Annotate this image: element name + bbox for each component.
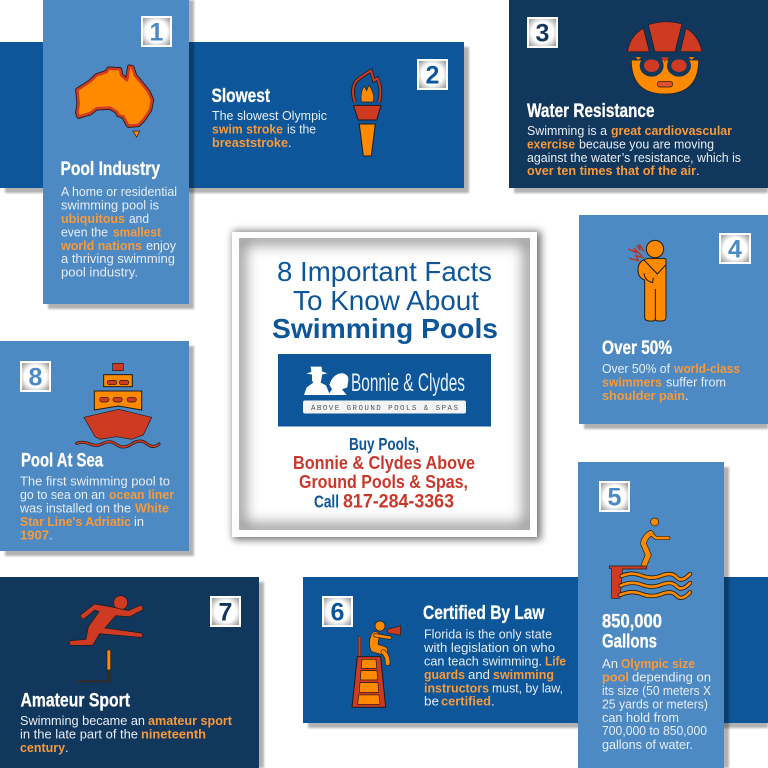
text: certified by law body: with legislation on who bbox=[423, 640, 555, 655]
badge: number 6: 6 bbox=[331, 598, 344, 626]
text: 850,000 gallons body: its size (50 meters X bbox=[602, 683, 711, 698]
icon: diver on board above waves bbox=[609, 518, 690, 598]
text: 850,000 gallons body: can hold from bbox=[602, 710, 679, 725]
text: slowest body: is the bbox=[287, 122, 316, 136]
text: certified by law body: certified bbox=[441, 694, 491, 708]
text: 850,000 gallons body: depending on bbox=[632, 670, 711, 684]
heading: 850,000 gallons: 850,000 bbox=[602, 611, 662, 633]
panel 6: certified by law bbox=[303, 577, 768, 728]
text: 850,000 gallons body: 700,000 to 850,000 bbox=[602, 723, 707, 738]
text: slowest body: . bbox=[288, 135, 292, 150]
logo bar: ABOVE GROUND POOLS & SPAS bbox=[311, 405, 458, 413]
text: certified by law body: . bbox=[491, 694, 495, 708]
text: amateur sport body: in the late part of the bbox=[20, 726, 138, 742]
text: pool industry body: ubiquitous bbox=[61, 211, 125, 226]
text: certified by law body: and bbox=[468, 667, 490, 682]
text: water resistance body: exercise bbox=[527, 136, 575, 152]
text: pool industry body: even the bbox=[61, 224, 108, 240]
logo: bonnie and clydes bbox=[278, 354, 491, 426]
heading: 850,000 gallons: Gallons bbox=[602, 631, 657, 653]
icon: torch bbox=[353, 71, 381, 156]
text: pool at sea body: Star Line's Adriatic bbox=[20, 514, 131, 529]
text: pool industry body: pool industry. bbox=[61, 264, 138, 280]
icon: australia map bbox=[77, 67, 152, 137]
heading: main title: Swimming Pools bbox=[272, 313, 498, 344]
badge: number 2: 2 bbox=[426, 62, 439, 90]
badge: number 3 bbox=[527, 17, 558, 48]
text: amateur sport body: century bbox=[20, 740, 66, 755]
text: pool industry body: swimming pool is bbox=[61, 198, 159, 212]
text: water resistance body: great cardiovascular bbox=[611, 123, 732, 138]
badge: number 1: 1 bbox=[150, 18, 164, 46]
text: 850,000 gallons body: An bbox=[602, 656, 618, 671]
badge: number 8 bbox=[20, 361, 51, 392]
text: pool at sea body: ocean liner bbox=[109, 487, 174, 502]
text: certified by law body: Florida is the only state bbox=[424, 627, 552, 642]
text: pool at sea body: was installed on the bbox=[19, 500, 131, 516]
heading: slowest: Slowest bbox=[212, 85, 270, 107]
text: over 50% body: suffer from bbox=[666, 374, 726, 390]
badge: number 7 bbox=[210, 596, 241, 627]
text: call to action: Bonnie & Clydes Above bbox=[293, 452, 475, 473]
badge: number 4 bbox=[719, 233, 751, 264]
badge: number 1 bbox=[141, 16, 172, 47]
text: amateur sport body: Swimming became an bbox=[20, 713, 145, 728]
text: certified by law body: Life bbox=[545, 654, 566, 668]
text: 850,000 gallons body: Olympic size bbox=[621, 656, 695, 671]
text: slowest body: breaststroke bbox=[212, 135, 288, 150]
panel 2: slowest bbox=[0, 42, 469, 193]
text: logo name: Bonnie & Clydes bbox=[351, 369, 465, 397]
text: pool industry body: and bbox=[129, 211, 149, 226]
text: water resistance body bbox=[527, 123, 741, 178]
text: amateur sport body: . bbox=[65, 740, 69, 755]
text: certified by law body: be bbox=[424, 694, 439, 708]
text: amateur sport body bbox=[20, 713, 233, 755]
heading: amateur sport: Amateur Sport bbox=[20, 690, 130, 712]
text: over 50% body bbox=[602, 361, 740, 403]
heading: over 50%: Over 50% bbox=[602, 337, 672, 359]
badge: number 3: 3 bbox=[536, 20, 549, 48]
text: certified by law body: swimming bbox=[493, 667, 554, 682]
badge: number 4: 4 bbox=[728, 236, 742, 264]
text: pool industry body: enjoy bbox=[146, 238, 177, 253]
icon: lifeguard on chair with megaphone bbox=[352, 621, 401, 707]
heading: 850,000 gallons bbox=[602, 611, 662, 653]
icon: hurdler bbox=[71, 596, 141, 682]
text: amateur sport body: nineteenth bbox=[141, 726, 206, 742]
panel 3: water resistance bbox=[509, 0, 768, 193]
heading: main title: To Know About bbox=[293, 285, 479, 316]
panel 1: pool industry bbox=[43, 0, 194, 309]
text: 850,000 gallons body: pool bbox=[602, 670, 629, 684]
text: pool industry body: smallest bbox=[113, 224, 162, 240]
panel 7: amateur sport bbox=[0, 577, 264, 768]
icon: person with shoulder pain bbox=[628, 240, 666, 321]
text: certified by law body: guards bbox=[424, 667, 465, 682]
text: pool at sea body: White bbox=[135, 500, 169, 516]
text: call to action: Call bbox=[314, 492, 339, 512]
heading: main title: 8 Important Facts bbox=[277, 256, 492, 287]
text: pool industry body bbox=[60, 184, 177, 280]
logo bar bbox=[303, 400, 466, 414]
text: water resistance body: because you are moving bbox=[579, 136, 714, 152]
badge: number 2 bbox=[417, 59, 448, 90]
text: certified by law body: can teach swimming. bbox=[424, 654, 542, 668]
text: water resistance body: against the water’s resistance, which is bbox=[527, 150, 741, 165]
panel 4: over 50% bbox=[579, 215, 768, 429]
text: over 50% body: swimmers bbox=[602, 374, 662, 390]
badge: number 5 bbox=[599, 481, 630, 512]
icon: swimmer head with cap and goggles bbox=[627, 22, 702, 94]
text: pool at sea body: . bbox=[49, 528, 53, 542]
text: certified by law body: instructors bbox=[424, 680, 489, 696]
text: pool industry body: a thriving swimming bbox=[61, 251, 175, 266]
icon: ocean liner bbox=[77, 363, 159, 447]
text: water resistance body: over ten times that of the air bbox=[527, 163, 696, 178]
heading: pool at sea: Pool At Sea bbox=[21, 450, 103, 472]
text: over 50% body: Over 50% of bbox=[602, 361, 670, 376]
badge: number 6 bbox=[322, 596, 353, 627]
text: pool industry body: A home or residential bbox=[61, 184, 177, 199]
text: 850,000 gallons body: gallons of water. bbox=[602, 737, 693, 752]
text: pool at sea body: in bbox=[134, 514, 144, 529]
text: amateur sport body: amateur sport bbox=[148, 713, 233, 728]
text: slowest body: The slowest Olympic bbox=[212, 108, 328, 123]
text: pool at sea body: go to sea on an bbox=[20, 487, 105, 502]
text: 850,000 gallons body bbox=[602, 656, 711, 752]
badge: number 8: 8 bbox=[29, 364, 43, 392]
badge: number 5: 5 bbox=[608, 484, 622, 512]
text: over 50% body: shoulder pain bbox=[602, 388, 685, 403]
text: call to action: Buy Pools, bbox=[349, 434, 419, 454]
text: certified by law body: must, by law, bbox=[492, 680, 563, 696]
text: slowest body bbox=[212, 108, 328, 150]
text: call to action: 817-284-3363 bbox=[343, 492, 454, 513]
text: pool at sea body: 1907 bbox=[20, 528, 49, 542]
text: water resistance body: . bbox=[696, 163, 700, 178]
text: water resistance body: Swimming is a bbox=[527, 123, 608, 138]
panel: center title card bbox=[232, 231, 541, 540]
text: call to action: Ground Pools & Spas, bbox=[299, 471, 468, 492]
heading: main title bbox=[272, 256, 498, 344]
text: over 50% body: world-class bbox=[673, 361, 740, 376]
text: 850,000 gallons body: 25 yards or meters) bbox=[602, 696, 708, 712]
text: pool at sea body bbox=[19, 474, 174, 542]
panel 8: pool at sea bbox=[0, 341, 194, 556]
text: pool at sea body: The first swimming pool to bbox=[20, 474, 170, 489]
heading: certified by law: Certified By Law bbox=[423, 602, 545, 624]
heading: water resistance: Water Resistance bbox=[527, 100, 655, 122]
text: call to action bbox=[293, 434, 475, 513]
text: over 50% body: . bbox=[685, 388, 689, 403]
panel 5: 850,000 gallons bbox=[578, 462, 729, 768]
icon: couple silhouettes bbox=[304, 367, 348, 395]
text: certified by law body bbox=[423, 627, 566, 708]
text: slowest body: swim stroke bbox=[212, 122, 283, 136]
badge: number 7: 7 bbox=[219, 598, 232, 626]
text: pool industry body: world nations bbox=[60, 238, 142, 253]
heading: pool industry: Pool Industry bbox=[60, 158, 160, 180]
